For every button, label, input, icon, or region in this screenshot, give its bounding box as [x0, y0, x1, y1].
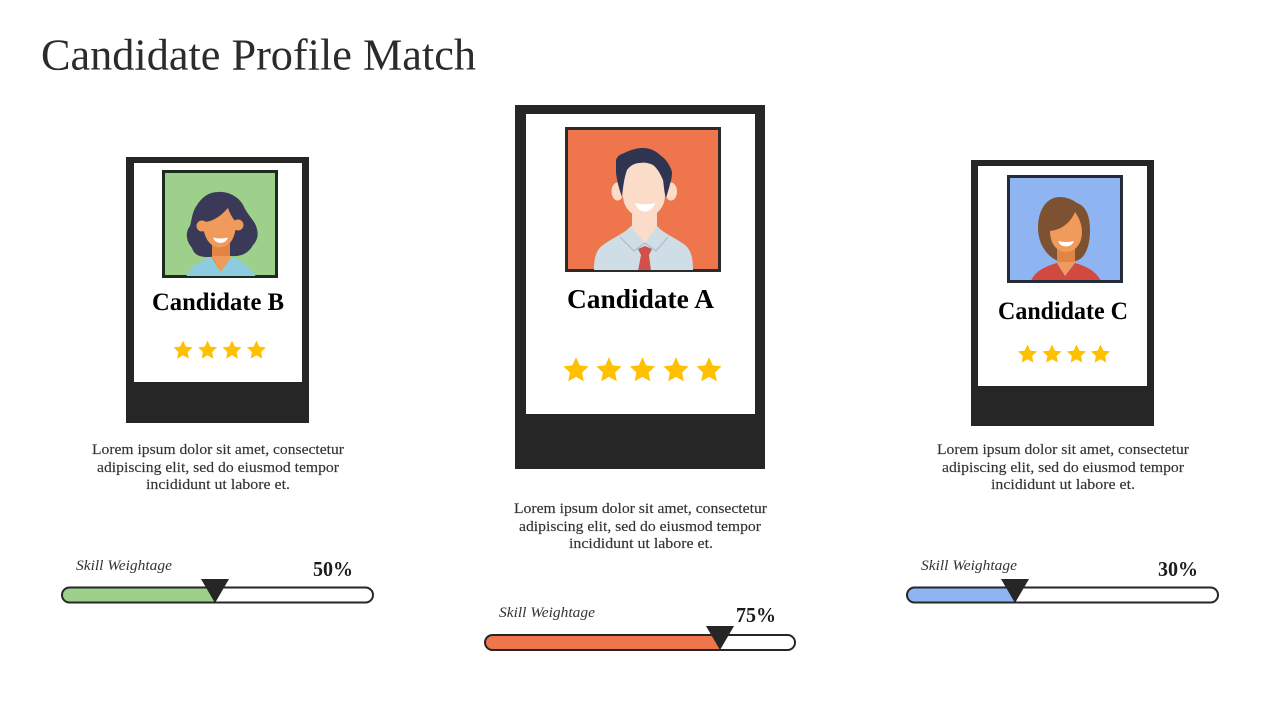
card frame A	[515, 105, 765, 469]
title: Candidate Profile Match	[41, 30, 476, 80]
gauge: Candidate B skill weightage 50%: 50%	[313, 557, 353, 581]
portrait: Candidate C	[1008, 176, 1122, 282]
text block: Candidate C description: incididunt ut labore et.	[991, 477, 1135, 493]
text block: Candidate B description: Lorem ipsum dolor sit amet, consectetur	[92, 442, 344, 458]
name: Candidate C: Candidate C	[998, 298, 1128, 325]
card inner B	[134, 163, 302, 382]
gauge: Candidate C skill weightage 30%: 30%	[1158, 557, 1198, 581]
text block: Candidate A description: incididunt ut labore et.	[569, 536, 713, 552]
rating: 4 stars	[174, 340, 266, 359]
rating: 5 stars	[563, 357, 722, 381]
portrait: Candidate B	[164, 172, 276, 277]
text block: Candidate A description	[514, 501, 767, 552]
card frame C	[971, 160, 1154, 426]
panel: Candidate A	[515, 105, 765, 469]
text block: Candidate C description: adipiscing elit, sed do eiusmod tempor	[942, 460, 1184, 476]
card inner C	[978, 166, 1147, 386]
gauge: Candidate A skill weightage 75%	[485, 603, 795, 650]
portrait: Candidate A	[566, 128, 720, 271]
gauge: Candidate C skill weightage 30%: Skill Weightage	[921, 558, 1017, 574]
name: Candidate A: Candidate A	[567, 284, 714, 314]
text block: Candidate B description	[92, 442, 344, 493]
card inner A	[526, 114, 755, 414]
panel: Candidate B	[126, 157, 309, 423]
text block: Candidate C description: Lorem ipsum dolor sit amet, consectetur	[937, 442, 1189, 458]
gauge: Candidate B skill weightage 50%: Skill Weightage	[76, 558, 172, 574]
text block: Candidate B description: adipiscing elit, sed do eiusmod tempor	[97, 460, 339, 476]
gauge: Candidate C skill weightage 30%	[907, 557, 1218, 603]
text block: Candidate A description: Lorem ipsum dolor sit amet, consectetur	[514, 501, 767, 517]
text block: Candidate B description: incididunt ut labore et.	[146, 477, 290, 493]
gauge: Candidate B skill weightage 50%	[62, 557, 373, 603]
panel: Candidate C	[971, 160, 1154, 426]
name: Candidate B: Candidate B	[152, 289, 284, 316]
gauge: Candidate A skill weightage 75%: Skill Weightage	[499, 605, 595, 621]
rating: 4 stars	[1018, 344, 1110, 363]
card frame B	[126, 157, 309, 423]
text block: Candidate C description	[937, 442, 1189, 493]
text block: Candidate A description: adipiscing elit, sed do eiusmod tempor	[519, 519, 761, 535]
gauge: Candidate A skill weightage 75%: 75%	[736, 603, 776, 627]
